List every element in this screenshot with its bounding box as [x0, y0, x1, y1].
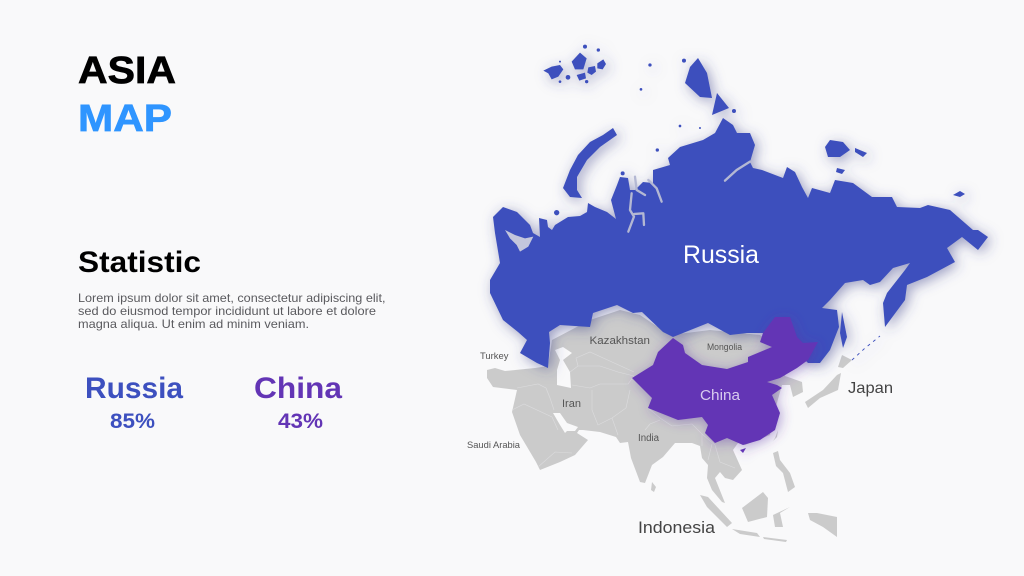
statistic description [78, 291, 386, 331]
statistic heading: Statistic [78, 246, 201, 279]
Arctic inlets and White Sea [505, 162, 750, 252]
country labels: Iran [562, 398, 581, 410]
water bodies [553, 347, 578, 433]
map of Asia [467, 45, 988, 542]
stat: Russia 85% [85, 372, 183, 433]
country labels: China [700, 388, 741, 404]
statistic description: magna aliqua. Ut enim ad minim veniam. [78, 317, 309, 331]
country labels: Turkey [480, 351, 509, 362]
title: ASIA [78, 50, 176, 92]
country labels: Russia [683, 241, 759, 269]
Japan [805, 355, 852, 408]
country labels: Indonesia [638, 518, 716, 537]
country labels [467, 241, 893, 537]
stat: China 43%: China [254, 372, 342, 405]
Russia [490, 45, 988, 368]
stat: China 43%: 43% [278, 410, 323, 433]
stat: Russia 85%: 85% [110, 410, 155, 433]
China [632, 317, 818, 453]
country labels: India [638, 433, 659, 444]
Sri Lanka, Taiwan and Southeast Asian islands [651, 430, 837, 542]
title: MAP [78, 98, 172, 140]
statistic description: sed do eiusmod tempor incididunt ut labore et dolore [78, 304, 376, 318]
country labels: Saudi Arabia [467, 440, 521, 451]
country borders [512, 352, 735, 468]
grey countries [487, 310, 852, 542]
country labels: Japan [848, 380, 893, 397]
stat: Russia 85%: Russia [85, 372, 183, 405]
statistic description: Lorem ipsum dolor sit amet, consectetur adipiscing elit, [78, 291, 386, 305]
title [78, 50, 176, 140]
Franz Josef Land archipelago [543, 45, 736, 215]
country labels: Kazakhstan [590, 335, 650, 347]
Arctic and Pacific islands [563, 58, 965, 348]
stat: China 43% [254, 372, 342, 433]
country labels: Mongolia [707, 342, 742, 352]
Kuril islands [852, 336, 880, 360]
